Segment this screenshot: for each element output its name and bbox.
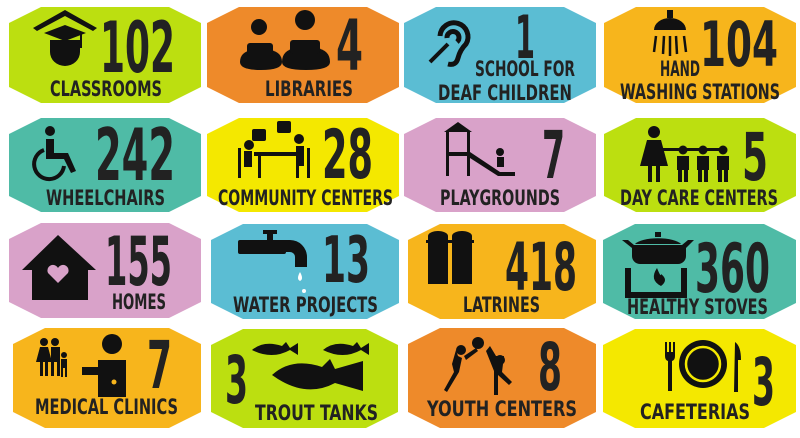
label: medical clinics: MEDICAL CLINICS (35, 395, 178, 419)
label: playgrounds: PLAYGROUNDS (440, 186, 560, 210)
icon: ear (430, 23, 468, 64)
tile: hand washing stations (604, 7, 796, 104)
tile: cafeterias (603, 329, 796, 428)
tile: school for deaf children (404, 3, 596, 105)
icon: family (640, 126, 729, 182)
label: homes: HOMES (112, 290, 166, 314)
number: 155: 155 (105, 223, 172, 302)
tile: libraries (207, 5, 399, 103)
icon: house with heart (22, 235, 96, 300)
icon: playground (444, 122, 515, 176)
icon: plate and cutlery (665, 340, 741, 392)
tile: water projects (211, 224, 399, 319)
number: 3: 3 (225, 342, 248, 419)
tile: homes (9, 223, 201, 318)
icon: trout (252, 342, 369, 391)
tile: community centers (207, 116, 399, 212)
tile: medical clinics (13, 327, 201, 428)
number: 3: 3 (752, 344, 775, 421)
icon: shower (654, 10, 686, 56)
icon: kids playing (444, 337, 512, 395)
label: school for deaf children (438, 57, 575, 105)
tile: playgrounds (404, 117, 596, 212)
label: hand washing stations (620, 57, 780, 104)
tile: trout tanks (211, 329, 398, 428)
number: 418: 418 (505, 229, 577, 306)
number: 102: 102 (100, 7, 175, 89)
tile: latrines (408, 224, 596, 319)
label: school for deaf children: DEAF CHILDREN (438, 81, 572, 105)
number: 242: 242 (95, 113, 175, 197)
number: 5: 5 (742, 119, 768, 196)
number: 13: 13 (322, 224, 370, 298)
icon: wheelchair (34, 126, 76, 179)
label: classrooms: CLASSROOMS (50, 77, 162, 101)
tile: classrooms (9, 7, 201, 103)
icon: latrines (426, 231, 474, 284)
tile: day care centers (604, 118, 796, 212)
icon: tap (238, 230, 307, 293)
number: 8: 8 (538, 329, 562, 406)
icon: doctor and family (36, 334, 126, 397)
label: school for deaf children: SCHOOL FOR (475, 57, 575, 81)
label: cafeterias: CAFETERIAS (640, 400, 750, 424)
icon: graduation cap (33, 10, 97, 66)
label: wheelchairs: WHEELCHAIRS (46, 186, 165, 210)
number: 28: 28 (322, 116, 373, 195)
number: 1: 1 (515, 3, 535, 73)
label: trout tanks: TROUT TANKS (255, 401, 378, 425)
icon: people talking at table (238, 121, 310, 178)
number: 7: 7 (147, 327, 172, 404)
label: youth centers: YOUTH CENTERS (426, 397, 577, 421)
number: 7: 7 (542, 117, 565, 194)
tile: healthy stoves (603, 224, 796, 319)
icon: stove with pot (622, 232, 694, 298)
label: hand washing stations: HAND (660, 57, 700, 81)
icon: readers (240, 10, 330, 70)
tile: youth centers (408, 328, 596, 428)
tile: wheelchairs (9, 113, 201, 212)
label: libraries: LIBRARIES (265, 77, 353, 101)
label: water projects: WATER PROJECTS (233, 293, 378, 317)
label: latrines: LATRINES (463, 293, 540, 317)
label: community centers: COMMUNITY CENTERS (218, 186, 393, 210)
number: 4: 4 (336, 5, 363, 87)
